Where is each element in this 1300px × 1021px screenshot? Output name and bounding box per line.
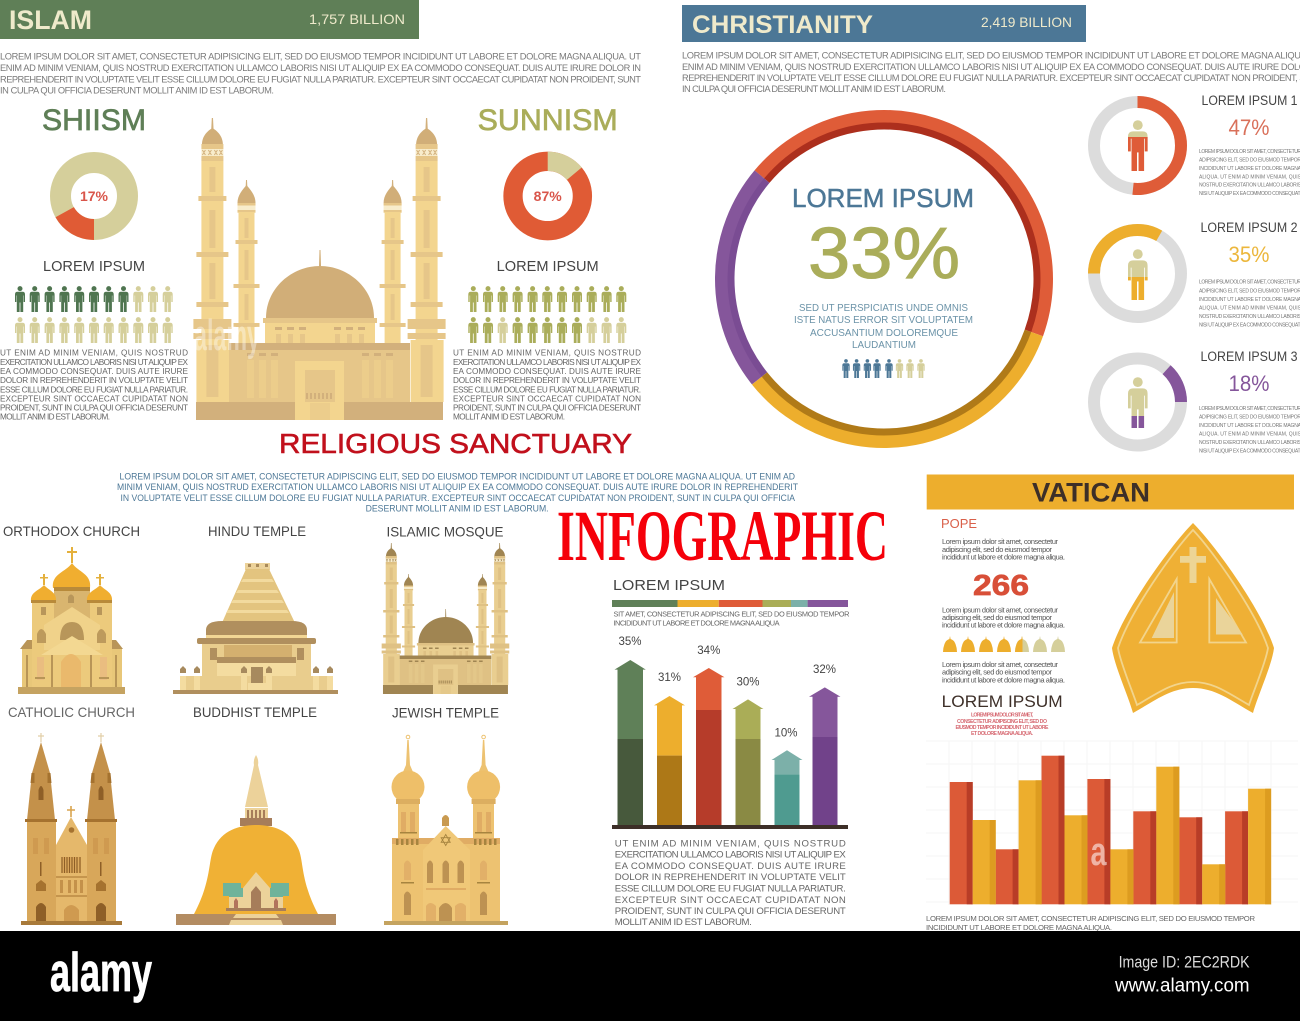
number: 266: 266	[973, 570, 1029, 602]
text block: center intro	[117, 471, 798, 514]
text block: red caption: ET DOLORE MAGNA ALIQUA.	[971, 731, 1034, 737]
text block: shiism: ESSE CILLUM DOLORE EU FUGIAT NULLA PARIATUR.	[0, 385, 188, 394]
image id: Image ID: 2EC2RDK	[1119, 952, 1250, 972]
big number: 33%	[808, 214, 960, 294]
text block: shiism: PROIDENT, SUNT IN CULPA QUI OFFICIA DESERUNT	[0, 404, 188, 412]
label: LOREM IPSUM	[43, 259, 145, 275]
text block: sunnism: MOLLIT ANIM ID EST LABORUM.	[453, 413, 565, 422]
stat: lorem ipsum 2	[1094, 220, 1300, 328]
text block: chart: PROIDENT, SUNT IN CULPA QUI OFFICIA DESERUNT	[615, 906, 846, 917]
bar: 30%: 30%	[736, 677, 760, 689]
text block: sunnism	[453, 349, 642, 422]
bar: 34%	[693, 645, 724, 826]
text block: shiism: MOLLIT ANIM ID EST LABORUM.	[0, 413, 110, 422]
text block: chart: ESSE CILLUM DOLORE EU FUGIAT NULLA PARIATUR.	[615, 884, 846, 894]
text block: shiism: UT ENIM AD MINIM VENIAM, QUIS NOSTRUD	[0, 349, 188, 358]
label: HINDU TEMPLE	[208, 523, 306, 539]
text block: sunnism: EXCEPTEUR SINT OCCAECAT CUPIDATAT NON	[453, 394, 641, 403]
text block: center intro: LOREM IPSUM DOLOR SIT AMET, CONSECTETUR ADIPISCING ELIT, SED DO EIUSMOD TEMPOR INCIDIDUNT UT LABORE ET DOLORE MAGNA ALIQUA. UT ENIM AD	[120, 471, 795, 481]
text block: chart	[615, 838, 846, 928]
text block: chart: DOLOR IN REPREHENDERIT IN VOLUPTATE VELIT	[615, 872, 846, 883]
header: christianity: 2,419 BILLION	[981, 14, 1072, 30]
text block: red caption: CONSECTETUR ADIPISCING ELIT, SED DO	[957, 719, 1047, 725]
text block: red caption: EIUSMOD TEMPOR INCIDIDUNT UT LABORE	[956, 725, 1049, 731]
text block: shiism: EXERCITATION ULLAMCO LABORIS NISI UT ALIQUIP EX	[0, 358, 189, 367]
stat: lorem ipsum 1: LOREM IPSUM DOLOR SIT AMET, CONSECTETUR	[1199, 149, 1300, 155]
text block: pope 1: incididunt ut labore et dolore magna aliqua.	[942, 553, 1065, 562]
stat: lorem ipsum 1: ALIQUA. UT ENIM AD MINIM VENIAM, QUIS	[1199, 174, 1300, 180]
label: BUDDHIST TEMPLE	[193, 704, 317, 720]
chart: vatican bars	[926, 741, 1298, 905]
text block: chart: EXERCITATION ULLAMCO LABORIS NISI UT ALIQUIP EX	[615, 850, 846, 861]
footer: alamy bar	[0, 931, 1300, 1021]
website: www.alamy.com	[1114, 976, 1250, 996]
text block: islam intro: LOREM IPSUM DOLOR SIT AMET, CONSECTETUR ADIPISICING ELIT, SED DO EIUSMOD TEMPOR INCIDIDUNT UT LABORE ET DOLORE MAGNA ALIQUA. UT	[0, 52, 641, 62]
donut: 87%	[513, 161, 582, 231]
text block: pope 2: incididunt ut labore et dolore magna aliqua.	[942, 621, 1065, 630]
ring text: ACCUSANTIUM DOLOREMQUE	[810, 328, 958, 339]
header: islam: 1,757 BILLION	[309, 11, 405, 27]
stat: lorem ipsum 2: ALIQUA. UT ENIM AD MINIM VENIAM, QUIS	[1199, 306, 1300, 312]
text block: center intro: MINIM VENIAM, QUIS NOSTRUD EXERCITATION ULLAMCO LABORIS NISI UT ALIQUIP EX EA COMMODO CONSEQUAT. DUIS AUTE IRURE DOLOR IN REPREHENDERIT	[117, 482, 798, 492]
donut: 17%	[60, 162, 128, 230]
header: christianity: CHRISTIANITY	[692, 11, 873, 39]
label: LOREM IPSUM	[497, 259, 599, 275]
heading: shiism: SHIISM	[42, 104, 146, 137]
stat: lorem ipsum 2: NISI UT ALIQUIP EX EA COMMODO CONSEQUAT.	[1199, 322, 1300, 328]
heading: sunnism: SUNNISM	[478, 104, 618, 137]
icon: mitre	[1112, 523, 1274, 713]
ring heading: LOREM IPSUM	[792, 183, 974, 213]
title: religious sanctuary: RELIGIOUS SANCTUARY	[279, 428, 632, 459]
text block: pope 3	[942, 660, 1065, 684]
illustration: large mosque	[193, 118, 446, 420]
text block: pope 2: adipiscing elit, sed do eiusmod tempor	[942, 613, 1053, 622]
stat: lorem ipsum 2: INCIDIDUNT UT LABORE ET DOLORE MAGNA	[1199, 297, 1300, 303]
stat: lorem ipsum 3: INCIDIDUNT UT LABORE ET DOLORE MAGNA	[1199, 423, 1300, 429]
axis	[612, 825, 848, 829]
text block: pope 3: adipiscing elit, sed do eiusmod tempor	[942, 668, 1053, 677]
ring text: LAUDANTIUM	[852, 340, 916, 351]
bar: 34%: 34%	[697, 645, 720, 657]
text block: sunnism: ESSE CILLUM DOLORE EU FUGIAT NULLA PARIATUR.	[453, 385, 641, 394]
text block: shiism: EXCEPTEUR SINT OCCAECAT CUPIDATAT NON	[0, 394, 188, 403]
label: CATHOLIC CHURCH	[8, 704, 135, 720]
text block: shiism	[0, 349, 189, 422]
building: islamic mosque	[382, 524, 509, 694]
panel: vatican	[926, 474, 1298, 932]
text block: chart: EXCEPTEUR SINT OCCAECAT CUPIDATAT NON	[615, 895, 846, 906]
stat: lorem ipsum 3: ALIQUA. UT ENIM AD MINIM VENIAM, QUIS	[1199, 432, 1300, 438]
text block: center intro: DESERUNT MOLLIT ANIM ID EST LABORUM.	[366, 504, 549, 514]
stat: lorem ipsum 1: NISI UT ALIQUIP EX EA COMMODO CONSEQUAT.	[1199, 191, 1300, 197]
stat: lorem ipsum 3: 18%	[1228, 371, 1270, 396]
bar: 31%	[654, 672, 685, 826]
heading: LOREM IPSUM	[613, 577, 725, 594]
ring text	[794, 303, 973, 351]
stat: lorem ipsum 1	[1094, 93, 1300, 197]
bar: 35%	[614, 636, 646, 826]
text block: chart caption	[926, 914, 1255, 932]
header: vatican: VATICAN	[1032, 478, 1150, 508]
stat: lorem ipsum 3: LOREM IPSUM DOLOR SIT AMET, CONSECTETUR	[1199, 406, 1300, 412]
text block: pope 2	[942, 605, 1065, 630]
header: vatican	[927, 474, 1294, 510]
people icons: sunnism	[468, 286, 626, 343]
text block: sunnism: PROIDENT, SUNT IN CULPA QUI OFFICIA DESERUNT	[453, 404, 641, 412]
donut: 17%: 17%	[80, 188, 109, 204]
text block: chart: MOLLIT ANIM ID EST LABORUM.	[615, 917, 752, 928]
building: catholic church	[8, 704, 135, 925]
label: JEWISH TEMPLE	[392, 704, 499, 720]
bar: 32%	[809, 664, 840, 826]
text block: christianity intro	[682, 50, 1300, 94]
text block: pope 3: incididunt ut labore et dolore magna aliqua.	[942, 675, 1065, 684]
building: hindu temple	[173, 523, 338, 694]
heading: lorem ipsum: LOREM IPSUM	[942, 692, 1063, 711]
panel: arrow bar chart	[612, 577, 850, 928]
stat: lorem ipsum 1: INCIDIDUNT UT LABORE ET DOLORE MAGNA	[1199, 166, 1300, 172]
text block: red caption	[956, 712, 1049, 737]
label: ISLAMIC MOSQUE	[386, 524, 504, 540]
stat: lorem ipsum 3: NOSTRUD EXERCITATION ULLAMCO LABORIS	[1199, 440, 1300, 446]
logo: alamy: alamy	[50, 941, 152, 1003]
header: christianity	[682, 5, 1086, 42]
text block: sunnism: EXERCITATION ULLAMCO LABORIS NISI UT ALIQUIP EX	[453, 358, 642, 367]
legend strip	[612, 600, 848, 607]
header: islam	[0, 0, 419, 39]
stat: lorem ipsum 3: ADIPISICING ELIT, SED DO EIUSMOD TEMPOR	[1199, 414, 1300, 420]
text block: center intro: IN VOLUPTATE VELIT ESSE CILLUM DOLORE EU FUGIAT NULLA PARIATUR. EXCEPTEUR SINT OCCAECAT CUPIDATAT NON PROIDENT, SUNT IN CULPA QUI OFFICIA	[120, 493, 796, 503]
text block: islam intro: REPREHENDERIT IN VOLUPTATE VELIT ESSE CILLUM DOLORE EU FUGIAT NULLA PARIATUR. EXCEPTEUR SINT OCCAECAT CUPIDATAT NON PROIDENT, SUNT	[0, 74, 641, 84]
text block: chart caption: LOREM IPSUM DOLOR SIT AMET, CONSECTETUR ADIPISCING ELIT, SED DO EIUSMOD TEMPOR	[926, 914, 1255, 923]
chart: large ring	[655, 50, 1113, 508]
chart text	[614, 610, 850, 628]
stat: lorem ipsum 2: NOSTRUD EXERCITATION ULLAMCO LABORIS	[1199, 314, 1300, 320]
text block: pope 3: Lorem ipsum dolor sit amet, consectetur	[942, 660, 1059, 669]
people icons: ring	[842, 359, 925, 378]
people icons: shiism	[15, 286, 173, 343]
text block: chart caption: INCIDIDUNT UT LABORE ET DOLORE MAGNA ALIQUA.	[926, 923, 1112, 932]
label: ORTHODOX CHURCH	[3, 523, 140, 539]
stat: lorem ipsum 2: LOREM IPSUM DOLOR SIT AMET, CONSECTETUR	[1199, 280, 1300, 286]
bar: 35%: 35%	[618, 636, 642, 648]
icons: mitre row	[943, 636, 1065, 652]
header: islam: ISLAM	[9, 5, 92, 35]
sub-panel: sunnism	[453, 104, 642, 422]
text block: red caption: LOREM IPSUM DOLOR SIT AMET,	[971, 712, 1034, 718]
text block: islam intro: ENIM AD MINIM VENIAM, QUIS NOSTRUD EXERCITATION ULLAMCO LABORIS NISI UT ALIQUIP EX EA COMMODO CONSEQUAT. DUIS AUTE IRURE DOLOR IN	[0, 63, 641, 73]
bar: 31%: 31%	[658, 672, 681, 684]
text block: pope 1	[942, 537, 1065, 562]
stat: lorem ipsum 1: 47%	[1228, 115, 1270, 140]
text block: chart: UT ENIM AD MINIM VENIAM, QUIS NOSTRUD	[615, 838, 846, 849]
stat: lorem ipsum 1: NOSTRUD EXERCITATION ULLAMCO LABORIS	[1199, 183, 1300, 189]
stat: lorem ipsum 1: ADIPISICING ELIT, SED DO EIUSMOD TEMPOR	[1199, 158, 1300, 164]
ring text: SED UT PERSPICIATIS UNDE OMNIS	[799, 303, 968, 314]
building: orthodox church	[3, 523, 140, 694]
text block: pope 1: adipiscing elit, sed do eiusmod tempor	[942, 545, 1053, 554]
text block: sunnism: DOLOR IN REPREHENDERIT IN VOLUPTATE VELIT	[453, 376, 641, 385]
panel: christianity	[655, 5, 1300, 508]
chart: vatican bars: a	[1090, 830, 1107, 874]
text block: sunnism: EA COMMODO CONSEQUAT. DUIS AUTE IRURE	[453, 367, 642, 376]
bar: 10%: 10%	[774, 728, 798, 740]
text block: christianity intro: IN CULPA QUI OFFICIA DESERUNT MOLLIT ANIM ID EST LABORUM.	[682, 84, 946, 94]
building: buddhist temple	[176, 704, 336, 925]
text block: islam intro	[0, 52, 641, 96]
text block: pope 2: Lorem ipsum dolor sit amet, consectetur	[942, 605, 1059, 614]
illustration: large mosque: alamy	[194, 311, 260, 360]
donut: 87%: 87%	[534, 188, 562, 204]
text block: islam intro: IN CULPA QUI OFFICIA DESERUNT MOLLIT ANIM ID EST LABORUM.	[0, 86, 274, 96]
text block: sunnism: UT ENIM AD MINIM VENIAM, QUIS NOSTRUD	[453, 349, 641, 358]
sub-panel: shiism	[0, 104, 189, 422]
text block: shiism: EA COMMODO CONSEQUAT. DUIS AUTE IRURE	[0, 367, 189, 376]
text block: shiism: DOLOR IN REPREHENDERIT IN VOLUPTATE VELIT	[0, 376, 188, 385]
stat: lorem ipsum 2: 35%	[1228, 242, 1270, 267]
building: jewish temple	[384, 704, 508, 925]
chart text: INCIDIDUNT UT LABORE ET DOLORE MAGNA ALIQUA	[614, 618, 780, 628]
bar: 32%: 32%	[813, 664, 836, 676]
title: infographic: INFOGRAPHIC	[557, 496, 888, 576]
ring text: ISTE NATUS ERROR SIT VOLUPTATEM	[794, 315, 973, 326]
bar: 30%	[732, 677, 764, 826]
heading: pope: POPE	[941, 516, 977, 531]
stat: lorem ipsum 3	[1088, 352, 1300, 454]
chart text: SIT AMET, CONSECTETUR ADIPISCING ELIT, SED DO EIUSMOD TEMPOR	[614, 610, 850, 618]
stat: lorem ipsum 2: ADIPISICING ELIT, SED DO EIUSMOD TEMPOR	[1199, 288, 1300, 294]
bar: 10%	[772, 728, 802, 825]
text block: pope 1: Lorem ipsum dolor sit amet, consectetur	[942, 537, 1059, 546]
text block: chart: EA COMMODO CONSEQUAT. DUIS AUTE IRURE	[615, 861, 846, 872]
stat: lorem ipsum 3: NISI UT ALIQUIP EX EA COMMODO CONSEQUAT.	[1199, 448, 1300, 454]
panel: islam	[0, 0, 642, 422]
